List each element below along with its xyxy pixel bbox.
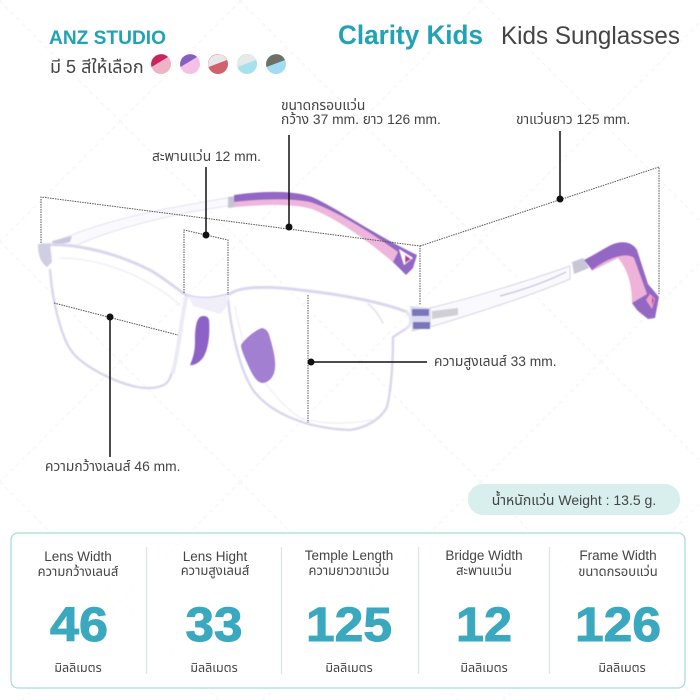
measurement guide lines <box>41 167 659 423</box>
spec: frame width: 126 <box>575 599 661 652</box>
swatch: purple <box>180 54 200 74</box>
near temple <box>410 242 659 332</box>
nose pad right <box>241 328 275 383</box>
frame size text <box>281 97 441 127</box>
spec: lens width: Lens Width <box>44 549 112 564</box>
lens width pointer <box>106 314 114 457</box>
spec: bridge width: สะพานแว่น <box>456 563 512 578</box>
spec: bridge width: มิลลิเมตร <box>460 661 508 675</box>
frame front <box>42 245 411 430</box>
spec: temple length: 125 <box>306 599 392 652</box>
spec: lens height: มิลลิเมตร <box>190 661 238 675</box>
swatch: pink <box>151 54 171 74</box>
spec: lens height: 33 <box>186 599 242 652</box>
callout: frame size <box>281 97 441 230</box>
spec: frame width <box>575 548 661 675</box>
callout: lens height <box>308 354 557 370</box>
spec: temple length: มิลลิเมตร <box>325 661 373 675</box>
spec: lens width: ความกว้างเลนส์ <box>38 564 118 579</box>
bridge pointer <box>202 167 210 238</box>
frame size text: กว้าง 37 mm. ยาว 126 mm. <box>281 112 441 127</box>
product title <box>338 20 680 50</box>
swatch: grey <box>266 54 286 74</box>
product name: Clarity Kids <box>338 20 483 50</box>
spec: lens height: ความสูงเลนส์ <box>181 563 249 578</box>
colour options <box>50 54 286 77</box>
lens width text: ความกว้างเลนส์ 46 mm. <box>45 459 180 474</box>
spec: temple length: ความยาวขาแว่น <box>308 563 390 578</box>
nose pad left <box>190 316 209 365</box>
spec: lens height <box>181 549 249 675</box>
swatch: light blue <box>237 54 257 74</box>
spec: bridge width: Bridge Width <box>445 548 523 563</box>
swatch: red <box>208 54 228 74</box>
lens height pointer <box>308 358 427 366</box>
spec: frame width: ขนาดกรอบแว่น <box>578 564 658 579</box>
spec: temple length <box>305 548 393 675</box>
weight badge <box>468 484 680 515</box>
product type: Kids Sunglasses <box>501 22 680 50</box>
glasses illustration <box>38 192 659 430</box>
frame size pointer <box>286 135 292 230</box>
spec: frame width: มิลลิเมตร <box>598 661 646 675</box>
spec: bridge width <box>445 548 523 675</box>
spec: lens width <box>38 549 118 675</box>
callout: bridge <box>152 148 261 238</box>
spec: lens width: มิลลิเมตร <box>54 661 102 675</box>
callout: temple length <box>516 111 630 202</box>
spec: bridge width: 12 <box>456 599 512 652</box>
spec: frame width: Frame Width <box>579 548 657 563</box>
panel: specifications <box>11 533 685 688</box>
frame size text: ขนาดกรอบแว่น <box>281 97 365 113</box>
temple length text: ขาแว่นยาว 125 mm. <box>516 111 630 127</box>
bridge text: สะพานแว่น 12 mm. <box>152 148 261 164</box>
spec: lens height: Lens Hight <box>183 549 248 564</box>
weight badge: น้ำหนักแว่น Weight : 13.5 g. <box>492 490 656 508</box>
temple length pointer <box>556 131 564 202</box>
callout: lens width <box>45 314 180 474</box>
colour options label: มี 5 สีให้เลือก <box>50 57 144 77</box>
lens height text: ความสูงเลนส์ 33 mm. <box>434 354 557 370</box>
far temple <box>52 192 417 275</box>
spec: lens width: 46 <box>50 599 108 652</box>
spec: temple length: Temple Length <box>305 548 393 563</box>
brand name: ANZ STUDIO <box>49 28 166 49</box>
